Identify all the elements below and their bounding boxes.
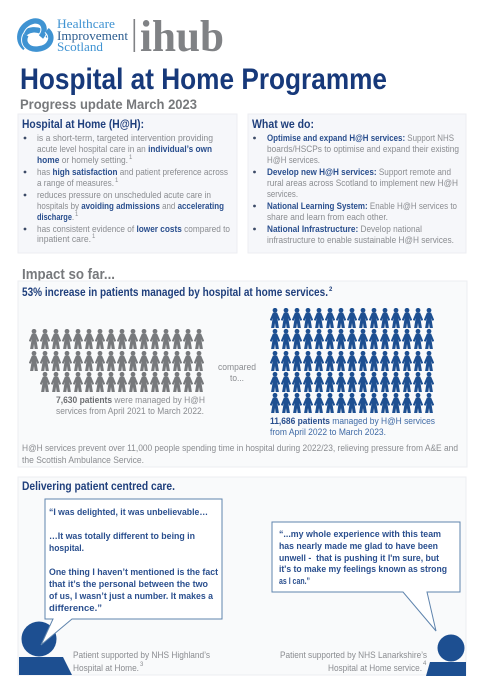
bullet text: H@H services. [267,155,320,166]
speech bubble: Lanarkshire quote: it's to make my feelings known as strong [279,564,447,575]
bullet text: National Infrastructure: Develop national [267,224,422,235]
icon: interlocking knot [20,21,51,49]
panel: What we do [248,114,466,253]
bullet text: is a short-term, targeted intervention providing [37,133,213,144]
bullet text: reduces pressure on unscheduled acute care in [37,190,211,201]
panel: patient increase: 2 [329,287,333,293]
bullet text: home or homely setting. [37,155,128,166]
bullet text [37,133,230,245]
bullet text: inpatient care. [37,234,91,245]
speech bubble: Lanarkshire quote: unwell - that is pushing it I'm sure, but [279,553,440,564]
speech bubble: Highland quote: difference.” [49,603,102,614]
panel heading: Hospital at Home (H@H): [22,117,144,131]
impact statement [22,443,458,466]
bullet text [267,133,459,246]
bullet text: discharge. [37,212,74,223]
caption: 2021 to 2022 patients: 7,630 patients were managed by H@H [56,395,205,406]
speech bubble: Lanarkshire quote: as I can.” [279,576,310,587]
compared to label [218,362,256,384]
speech bubble: Highland quote: of us, I wasn’t just a number. It makes a [49,591,214,602]
subtitle: Progress update March 2023 [20,97,197,112]
attribution: Lanarkshire patient: Patient supported by NHS Lanarkshire’s [280,650,427,661]
organisation name: Scotland [57,40,104,54]
bullet text: boards/HSCPs to optimise and expand their existing [267,144,459,155]
caption: 2021 to 2022 patients: services from April 2021 to March 2022. [56,406,204,417]
bullet text: 1 [92,234,96,240]
attribution: Lanarkshire patient: 4 [423,661,427,667]
bullet text: 1 [75,212,79,218]
bullet text: Optimise and expand H@H services: Support NHS [267,133,454,144]
panel: Hospital at Home definition [18,114,237,253]
bullet text: infrastructure to enable sustainable H@H services. [267,235,454,246]
logo: Healthcare Improvement Scotland ihub [20,12,224,61]
bullet text: 1 [129,155,133,161]
compared to label: compared [218,362,256,373]
speech bubble: Lanarkshire quote: “...my whole experience with this team [279,529,441,540]
attribution: Highland patient [73,650,210,674]
caption: 2022 to 2023 patients: 11,686 patients managed by H@H services [270,416,435,427]
bullet text: share and learn from each other. [267,212,388,223]
attribution: Lanarkshire patient: Hospital at Home service. [328,663,422,674]
organisation name [57,17,129,54]
panel heading: Delivering patient centred care. [22,479,175,493]
speech bubble: Highland quote: “I was delighted, it was unbelievable… [49,507,208,518]
panel: patient centred care [18,477,466,676]
icon: patient two [426,634,466,676]
pictogram: 7,630 patients [29,329,204,392]
bullet text: has high satisfaction and patient preference across [37,167,228,178]
panel heading: 53% increase in patients managed by hospital at home services. [22,285,328,299]
title: Hospital at Home Programme [20,63,387,96]
bullet text: hospitals by avoiding admissions and accelerating [37,201,224,212]
attribution: Highland patient: Patient supported by NHS Highland’s [73,650,210,661]
panel heading: What we do: [252,117,314,131]
attribution: Highland patient: 3 [140,662,144,668]
speech bubble: Lanarkshire quote: has nearly made me glad to have been [279,541,438,552]
bullet text: rural areas across Scotland to implement new H@H [267,178,458,189]
bullet text: National Learning System: Enable H@H services to [267,201,457,212]
caption: 2022 to 2023 patients: from April 2022 to March 2023. [270,427,386,438]
organisation name: Healthcare [57,17,115,31]
pictogram: 11,686 patients [270,308,434,413]
impact statement: the Scottish Ambulance Service. [22,455,144,466]
speech bubble: Highland quote: One thing I haven’t mentioned is the fact [49,567,219,578]
icon: patient one [19,622,72,675]
organisation name: Improvement [57,29,129,43]
caption: 2021 to 2022 patients [56,395,205,417]
panel: patient increase [18,281,467,467]
bullet text: acute level hospital care in an individual’s own [37,144,212,155]
speech bubble: Highland quote: hospital. [49,543,84,554]
speech bubble: Lanarkshire quote [272,522,460,631]
bullet text: has consistent evidence of lower costs compared to [37,224,230,235]
speech bubble: Highland quote: that it’s the personal between the two [49,579,208,590]
bullet text: services. [267,189,298,200]
attribution: Highland patient: Hospital at Home. [73,663,139,674]
bullet text: Develop new H@H services: Support remote and [267,167,451,178]
caption: 2022 to 2023 patients [270,416,435,438]
attribution: Lanarkshire patient [280,650,427,674]
speech bubble: Highland quote [41,499,222,645]
speech bubble: Highland quote: …It was totally different to being in [49,531,195,542]
ihub wordmark: ihub [140,12,224,61]
bullet text: a range of measures. [37,178,114,189]
compared to label: to... [230,373,244,384]
section heading: impact: Impact so far... [22,266,115,283]
bullet text: 1 [115,178,119,184]
